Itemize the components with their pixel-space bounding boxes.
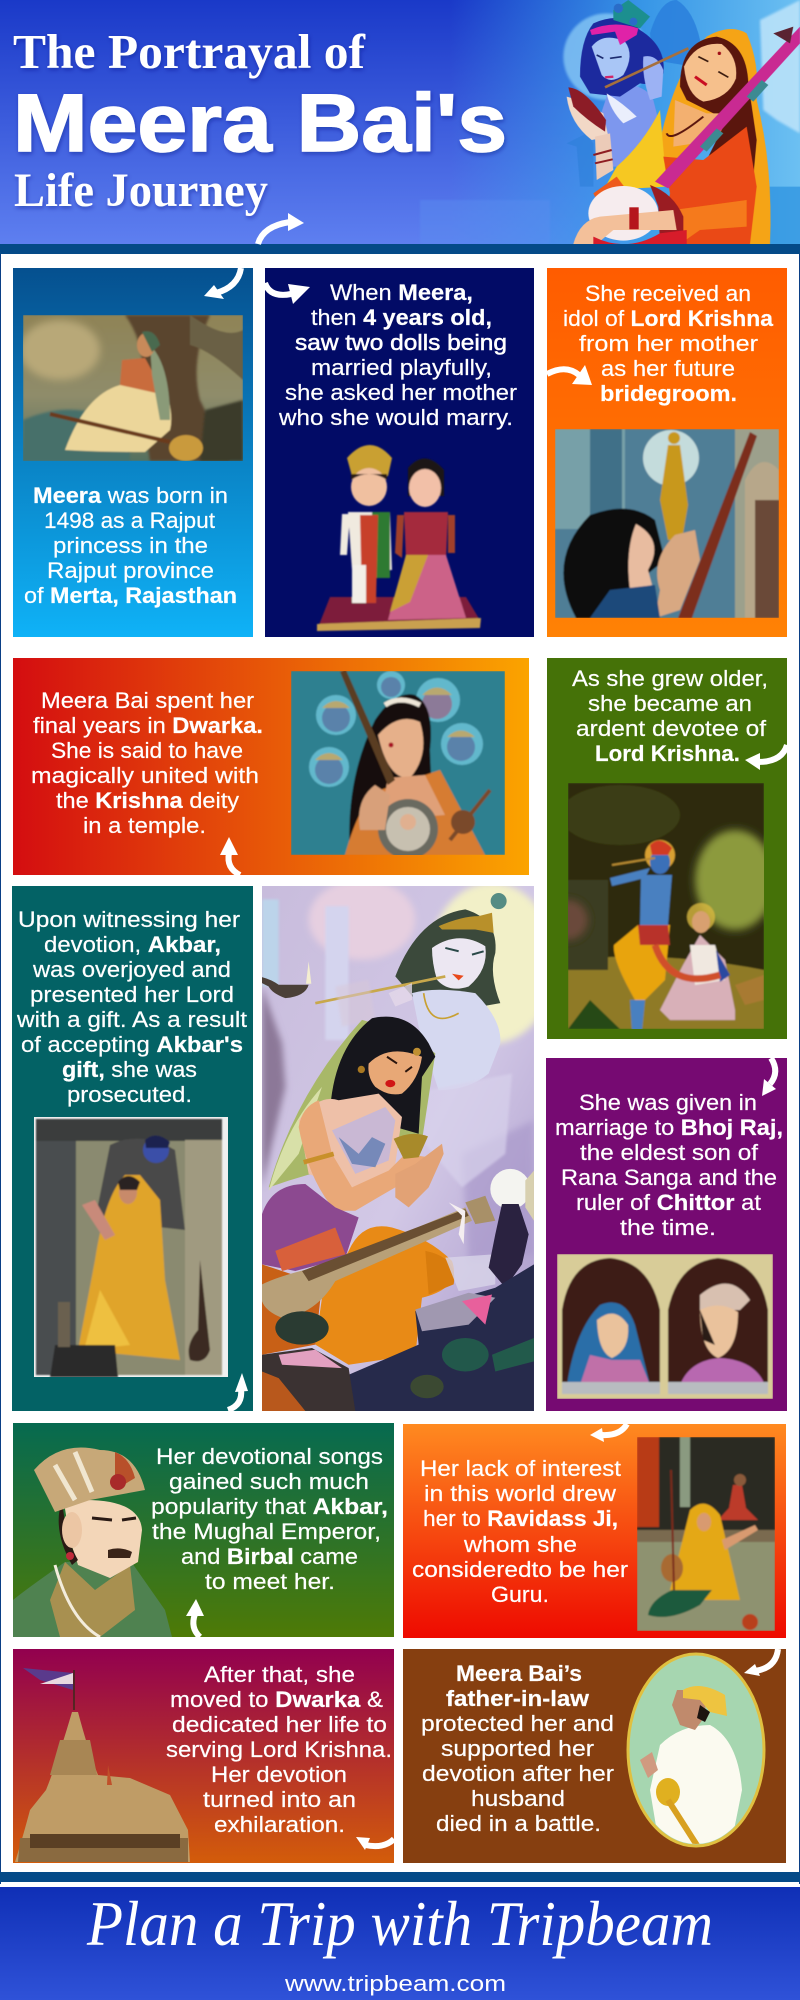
panel: father-in-law <box>403 1649 786 1863</box>
text: whom she <box>463 1532 577 1557</box>
text: bridegroom. <box>600 381 737 406</box>
text: final years in Dwarka. <box>33 713 263 738</box>
text <box>412 1456 628 1607</box>
panel: Meera born <box>13 268 253 637</box>
footer <box>0 1887 800 2000</box>
text: presented her Lord <box>30 982 234 1007</box>
text: princess in the <box>53 533 208 558</box>
orange lap <box>315 1226 454 1365</box>
image: Meera under tree <box>20 315 243 461</box>
text: dedicated her life to <box>172 1712 387 1737</box>
text: supported her <box>441 1736 594 1761</box>
text: ardent devotee of <box>576 716 767 741</box>
veena <box>262 1207 472 1318</box>
arrow: teal panel <box>228 1373 248 1410</box>
tanpura neck <box>655 27 800 188</box>
text: her to Ravidass Ji, <box>423 1506 618 1531</box>
text: ruler of Chittor at <box>576 1190 761 1215</box>
arrow: father-in-law panel <box>744 1649 778 1676</box>
text: gained such much <box>169 1469 369 1494</box>
text: the Krishna deity <box>56 788 239 813</box>
top band <box>0 244 800 254</box>
text: she became an <box>588 691 752 716</box>
arrow: Dwarka panel <box>356 1837 394 1850</box>
image: Meera with five Krishnas <box>291 670 505 859</box>
text: as her future <box>601 356 735 381</box>
text <box>555 1090 783 1240</box>
text: the eldest son of <box>580 1140 759 1165</box>
Krishna <box>395 909 500 1010</box>
arrow: green panel <box>745 745 787 770</box>
text: father-in-law <box>446 1686 590 1711</box>
text: Rajput province <box>47 558 214 583</box>
text: prosecuted. <box>67 1082 192 1107</box>
arrow: red panel <box>220 837 240 875</box>
image: Meera and Ravidass <box>637 1437 775 1631</box>
hair <box>330 1017 435 1134</box>
text: She was given in <box>579 1090 757 1115</box>
footer url: www.tripbeam.com <box>284 1971 506 1996</box>
panel: Ravidass Ji <box>403 1424 786 1638</box>
text <box>563 281 774 406</box>
veil <box>269 1020 435 1187</box>
arrow: Ravidass panel <box>590 1424 627 1442</box>
text: gift, she was <box>62 1057 197 1082</box>
image: two dolls <box>317 445 481 631</box>
text <box>31 688 263 838</box>
text: As she grew older, <box>572 666 768 691</box>
purple sari <box>262 1184 359 1271</box>
text: she asked her mother <box>285 380 517 405</box>
face <box>368 1051 422 1094</box>
text: magically united with <box>31 763 259 788</box>
text: was overjoyed and <box>32 957 231 982</box>
text: exhilaration. <box>214 1812 345 1837</box>
text: devotion after her <box>422 1761 614 1786</box>
arrow: Akbar panel <box>186 1599 204 1637</box>
text: Her devotional songs <box>156 1444 383 1469</box>
title: Meera Bai's <box>13 78 507 169</box>
Krishna <box>601 86 658 167</box>
text: Meera was born in <box>33 483 228 508</box>
text: turned into an <box>203 1787 356 1812</box>
arrow: panel 1 <box>204 268 241 299</box>
text <box>151 1444 388 1594</box>
text <box>572 666 768 766</box>
panel: final years in Dwarka <box>13 658 529 875</box>
text: to meet her. <box>205 1569 335 1594</box>
text: When Meera, <box>330 280 473 305</box>
bottom band <box>0 1872 800 1882</box>
text: idol of Lord Krishna <box>563 306 774 331</box>
text: who she would marry. <box>278 405 513 430</box>
text: in a temple. <box>83 813 206 838</box>
text: then 4 years old, <box>311 305 492 330</box>
image: royal couple <box>557 1254 773 1399</box>
text: moved to Dwarka & <box>170 1687 383 1712</box>
title <box>13 24 507 217</box>
panel: idol of Krishna <box>547 268 787 637</box>
text: Meera Bai spent her <box>41 688 254 713</box>
face <box>684 44 736 102</box>
text: in this world drew <box>424 1481 616 1506</box>
text: of Merta, Rajasthan <box>24 583 237 608</box>
portrait: Akbar <box>13 1448 172 1637</box>
text: She received an <box>585 281 751 306</box>
text: of accepting Akbar's <box>21 1032 243 1057</box>
text: Meera Bai’s <box>456 1661 582 1686</box>
title: Life Journey <box>14 164 268 217</box>
arrow: panel 2 <box>265 283 310 304</box>
text <box>278 280 517 430</box>
text <box>16 907 247 1107</box>
text: married playfully, <box>311 355 492 380</box>
arrow: panel 3 <box>547 365 592 385</box>
text: the Mughal Emperor, <box>152 1519 381 1544</box>
text: devotion, Akbar, <box>44 932 221 957</box>
veil <box>653 29 771 244</box>
text: Her devotion <box>211 1762 347 1787</box>
footer heading: Plan a Trip with Tripbeam <box>86 1888 713 1959</box>
text: Her lack of interest <box>420 1456 621 1481</box>
arms <box>299 1100 429 1211</box>
white cloth and idol <box>445 1254 495 1291</box>
text: 1498 as a Rajput <box>44 508 215 533</box>
text: husband <box>471 1786 565 1811</box>
header banner <box>0 0 800 244</box>
text: and Birbal came <box>181 1544 358 1569</box>
arrow: header to panel 1 <box>258 213 304 244</box>
text: Upon witnessing her <box>18 907 240 932</box>
dress <box>660 127 757 244</box>
text: from her mother <box>579 331 758 356</box>
panel: Akbar's gift <box>12 886 253 1411</box>
torso <box>299 1094 402 1197</box>
text: consideredto be her <box>412 1557 628 1582</box>
image: Meera with idol <box>555 429 779 618</box>
illustration: Krishna and Meera <box>563 0 800 244</box>
text: Lord Krishna. <box>595 741 740 766</box>
text <box>421 1661 614 1836</box>
gourd <box>588 186 658 241</box>
panel: Akbar and Birbal <box>13 1423 394 1637</box>
text: popularity that Akbar, <box>151 1494 388 1519</box>
image: Dwarka temple <box>15 1668 190 1862</box>
text: with a gift. As a result <box>16 1007 247 1032</box>
text: Guru. <box>491 1582 549 1607</box>
text: Rana Sanga and the <box>561 1165 777 1190</box>
arrow: purple panel <box>762 1058 776 1096</box>
title: The Portrayal of <box>13 24 366 79</box>
text <box>166 1662 392 1837</box>
arm and hand <box>573 210 677 244</box>
image: oval portrait <box>628 1654 764 1850</box>
text: died in a battle. <box>436 1811 601 1836</box>
panel: marriage to Bhoj Raj <box>546 1058 787 1411</box>
hair <box>680 36 757 171</box>
panel: dolls <box>265 268 534 637</box>
text <box>24 483 237 608</box>
panel: ardent devotee <box>547 658 787 1039</box>
lower altar <box>349 1264 534 1411</box>
image: Meera dancing with Krishna <box>34 1117 228 1377</box>
text: the time. <box>620 1215 716 1240</box>
text: marriage to Bhoj Raj, <box>555 1115 783 1140</box>
panel: moved to Dwarka <box>13 1649 394 1863</box>
text: serving Lord Krishna. <box>166 1737 392 1762</box>
text: She is said to have <box>51 738 243 763</box>
text: protected her and <box>421 1711 614 1736</box>
image: Krishna and Meera garland <box>568 783 764 1029</box>
text: After that, she <box>204 1662 355 1687</box>
lamp <box>262 977 309 998</box>
text: saw two dolls being <box>295 330 507 355</box>
image: Meera and Krishna central painting <box>262 879 555 1411</box>
